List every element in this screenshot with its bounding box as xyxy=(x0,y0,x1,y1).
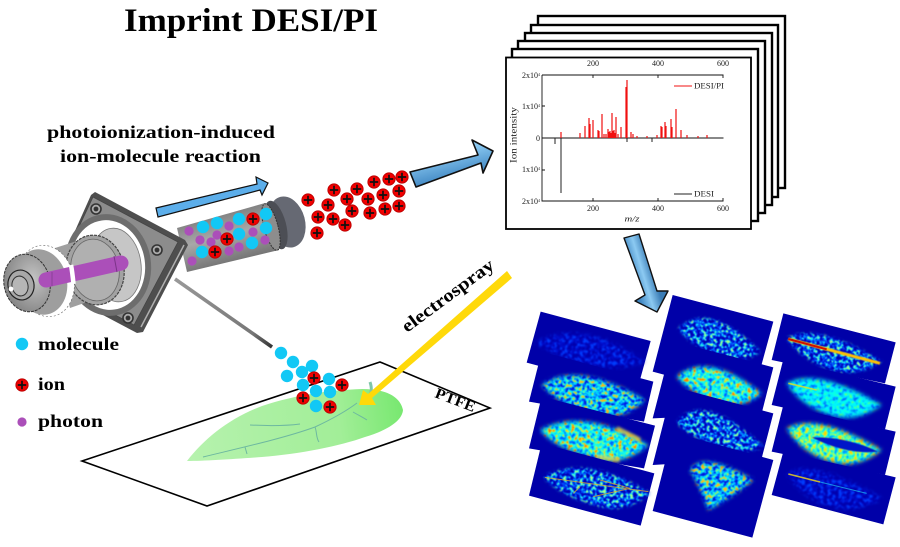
axis labels: 4 xyxy=(538,166,540,171)
legend DESI/PI: DESI/PI xyxy=(694,82,724,90)
subtitle: photoionization-induced ion-molecule reaction xyxy=(47,122,275,166)
axis labels: 200 xyxy=(587,204,599,213)
axis labels: 600 xyxy=(717,204,729,213)
white ring xyxy=(11,240,81,322)
rear cylinder xyxy=(86,225,146,305)
arrow: spectra to images xyxy=(624,234,668,312)
spectra stack xyxy=(506,16,785,229)
title: Imprint DESI/PI xyxy=(124,3,378,39)
arrow: ions to mass spectrometer xyxy=(410,140,493,187)
axis labels: 4 xyxy=(538,72,540,77)
neck tube xyxy=(55,240,90,308)
axis labels: 2x10 xyxy=(522,197,538,206)
front mass spectrum panel xyxy=(506,58,751,229)
column 2 xyxy=(653,295,773,538)
axis labels: 0 xyxy=(536,134,540,143)
axis labels: 400 xyxy=(652,59,664,68)
legend xyxy=(15,334,119,431)
screws xyxy=(91,204,162,323)
legend: photon: photon xyxy=(38,411,103,431)
capillary needle xyxy=(175,279,272,347)
photon beam xyxy=(46,256,121,286)
arrow: electrospray xyxy=(359,271,512,405)
axis labels: 600 xyxy=(717,59,729,68)
axis labels xyxy=(508,59,729,224)
heatmap image panels xyxy=(527,295,896,538)
axis labels: Ion intensity xyxy=(508,106,518,163)
label: electrospray: electrospray xyxy=(397,255,498,336)
axis labels: 2x10 xyxy=(522,71,538,80)
arrow: flow direction in tube xyxy=(156,177,268,217)
axis labels: 400 xyxy=(652,204,664,213)
red DESI/PI peaks xyxy=(561,80,707,138)
mounting plate xyxy=(50,192,188,333)
axis labels: 4 xyxy=(538,103,540,108)
photons in tube xyxy=(184,221,270,266)
axis labels: 1x10 xyxy=(522,165,538,174)
subtitle: photoionization-induced ion-molecule reaction: photoionization-induced xyxy=(47,122,275,142)
label: PTFE: PTFE xyxy=(433,386,478,416)
stacked back sheets xyxy=(512,16,785,221)
legend DESI: DESI xyxy=(694,190,714,198)
axis labels: 200 xyxy=(587,59,599,68)
instrument: ionization tube assembly xyxy=(0,192,311,347)
particles inside tube xyxy=(184,208,272,266)
PTFE sheet with leaf xyxy=(82,362,490,506)
axis labels: 4 xyxy=(538,198,540,203)
end cap xyxy=(258,192,311,252)
ions in tube xyxy=(208,212,260,259)
axis labels: m/z xyxy=(624,214,641,224)
legend DESI xyxy=(674,190,714,198)
legend: ion: ion xyxy=(38,374,65,394)
spray particles above leaf xyxy=(275,347,349,414)
legend DESI/PI xyxy=(674,82,724,90)
flying ions xyxy=(301,170,409,240)
front cylinder xyxy=(60,230,130,310)
molecules in tube xyxy=(196,208,272,258)
nose cone xyxy=(0,244,73,320)
black DESI peaks xyxy=(555,138,652,193)
axes xyxy=(542,75,724,201)
axis labels: 1x10 xyxy=(522,102,538,111)
column 3 xyxy=(772,313,896,524)
subtitle: photoionization-induced ion-molecule reaction: ion-molecule reaction xyxy=(60,146,261,166)
sprayed ions xyxy=(296,371,349,414)
right tube xyxy=(177,203,279,272)
sprayed molecules xyxy=(275,347,336,412)
column 1 xyxy=(527,312,655,526)
leaf xyxy=(187,382,403,461)
legend: molecule: molecule xyxy=(38,334,119,354)
